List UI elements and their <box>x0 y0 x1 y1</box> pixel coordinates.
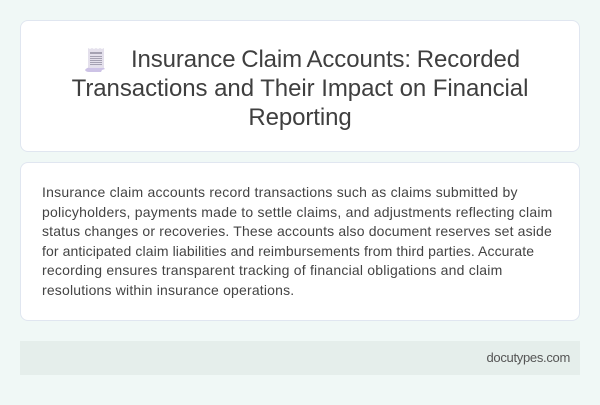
description text <box>42 184 553 298</box>
panel: description card <box>20 162 580 321</box>
panel: title card <box>20 20 580 152</box>
description text: policyholders, payments made to settle claims, and adjustments reflecting claim <box>42 204 553 220</box>
heading: Reporting <box>248 104 352 131</box>
description text: resolutions within insurance operations. <box>42 282 294 298</box>
heading <box>72 46 528 131</box>
description text: Insurance claim accounts record transactions such as claims submitted by <box>42 184 518 200</box>
description text: status changes or recoveries. These accounts also document reserves set aside <box>42 223 552 239</box>
heading: Transactions and Their Impact on Financial <box>72 75 528 102</box>
footer source label: docutypes.com <box>486 350 570 365</box>
footer bar <box>20 341 580 375</box>
description text: for anticipated claim liabilities and reimbursements from third parties. Accurate <box>42 242 534 258</box>
description text: recording ensures transparent tracking of financial obligations and claim <box>42 262 502 278</box>
icon: ledger receipt <box>85 48 105 72</box>
heading: Insurance Claim Accounts: Recorded <box>131 46 520 73</box>
